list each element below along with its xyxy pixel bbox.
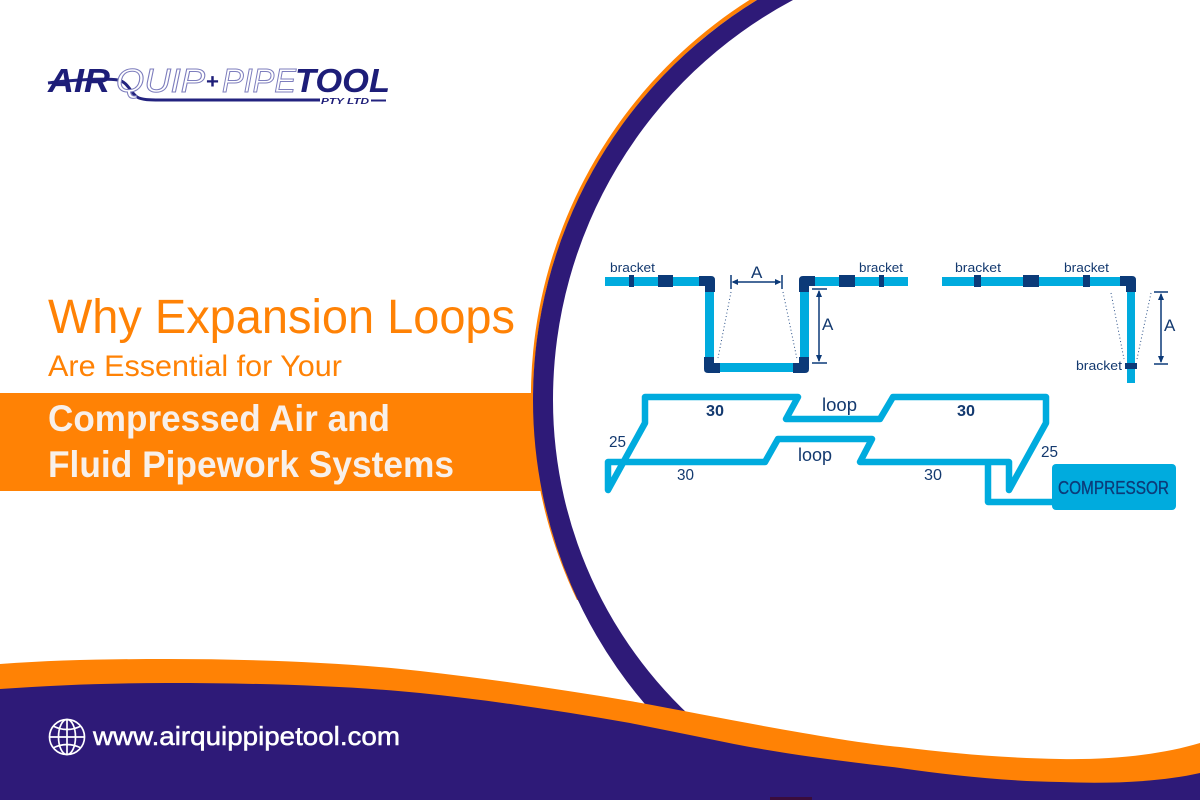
diagram: U-shaped expansion loop: A — [751, 263, 763, 282]
icon: globe — [50, 720, 84, 754]
compressor box: COMPRESSOR — [1058, 478, 1169, 498]
logo: Airquip Pipetool: QUIP — [116, 62, 205, 99]
diagram: pipework ring main with compressor — [608, 395, 1176, 510]
pipe length labels — [609, 395, 1058, 484]
logo: Airquip Pipetool: PTY LTD — [321, 97, 369, 106]
diagram: L-shaped offset: A — [1164, 316, 1176, 335]
band heading — [48, 398, 454, 485]
small dark mark at bottom edge — [770, 797, 812, 800]
orange title band — [0, 393, 545, 491]
diagram: L-shaped offset — [942, 260, 1176, 383]
pipe length labels: 30 — [677, 467, 694, 484]
diagram: U-shaped expansion loop: bracket — [610, 260, 655, 275]
diagram: U-shaped expansion loop: A — [822, 315, 834, 334]
logo: Airquip Pipetool: AIR — [47, 62, 110, 99]
pipe length labels: loop — [822, 395, 857, 415]
diagram: L-shaped offset: bracket — [1076, 358, 1122, 373]
pipe length labels: 30 — [706, 403, 724, 420]
diagram: U-shaped expansion loop — [605, 260, 908, 373]
website URL: www.airquippipetool.com — [92, 721, 400, 751]
footer wave: orange — [0, 659, 1200, 800]
pipe length labels: 30 — [924, 467, 942, 484]
logo: Airquip Pipetool — [47, 62, 390, 106]
pipe length labels: loop — [798, 445, 832, 465]
band heading: Compressed Air and — [48, 398, 390, 439]
logo: Airquip Pipetool: + — [206, 71, 219, 93]
diagram: U-shaped expansion loop: bracket — [859, 260, 903, 275]
pipe length labels: 25 — [1041, 444, 1058, 461]
footer wave: purple — [0, 683, 1200, 800]
diagram: L-shaped offset: bracket — [955, 260, 1001, 275]
diagram: L-shaped offset: bracket — [1064, 260, 1109, 275]
band heading: Fluid Pipework Systems — [48, 444, 454, 485]
subtitle: Are Essential for Your: Are Essential for Your — [48, 350, 342, 383]
logo: Airquip Pipetool: TOOL — [295, 62, 390, 99]
circular arc: orange and purple ring — [531, 0, 793, 740]
logo: Airquip Pipetool: PIPE — [222, 62, 297, 99]
pipe length labels: 25 — [609, 434, 626, 451]
title: Why Expansion Loops: Why Expansion Loops — [48, 291, 515, 344]
compressor box — [1052, 464, 1176, 510]
pipe length labels: 30 — [957, 403, 975, 420]
